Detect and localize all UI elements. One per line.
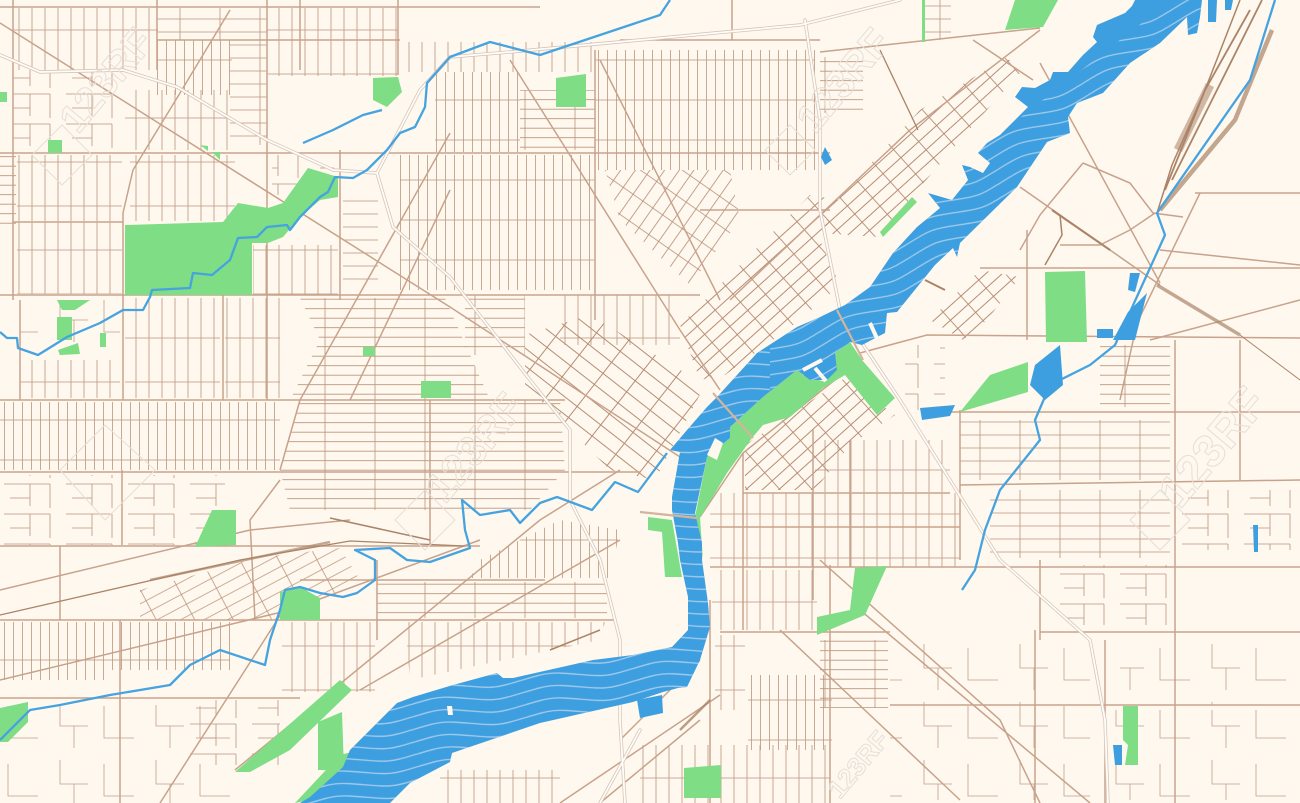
river waves: middle and south reach: [280, 340, 770, 803]
watermark: centre: 123RF: [416, 384, 533, 511]
white piers: [803, 323, 880, 381]
watermark: east: 123RF: [1148, 377, 1276, 516]
park: south river strips: [235, 680, 352, 803]
river islands and piers: [447, 0, 1135, 715]
bridges: [640, 310, 863, 518]
watermark: south: 123RF: [822, 725, 895, 803]
park: south lot: [684, 765, 721, 798]
park: large west park: [125, 168, 338, 295]
park: far southeast strip: [1123, 706, 1138, 765]
park: west bank: [648, 517, 682, 577]
park: north squares: [373, 74, 586, 107]
park: east wedge: [960, 362, 1028, 412]
river waves: northeast reach: [770, 0, 1202, 388]
stream: south creek: [0, 453, 667, 740]
park: river loop: [280, 587, 320, 620]
park: west small patches: [0, 92, 375, 356]
watermark: north west: 123RF: [51, 21, 162, 141]
ponds and small water bodies: [637, 0, 1258, 765]
stream: north branch: [303, 110, 382, 143]
park: northeast riverside: [880, 0, 1058, 237]
park: far west corner: [0, 702, 28, 742]
park: mid city square: [421, 381, 451, 398]
river: [300, 0, 1202, 803]
stream: north creek: [0, 0, 670, 355]
park: river island: [695, 342, 895, 560]
park: southwest lot: [195, 510, 236, 547]
watermark: north east: 123RF: [788, 21, 899, 141]
stream: east creek: [962, 0, 1275, 590]
watermark logos: [32, 125, 1190, 550]
park: east rectangle: [1045, 271, 1087, 342]
park: south east: [817, 566, 887, 635]
